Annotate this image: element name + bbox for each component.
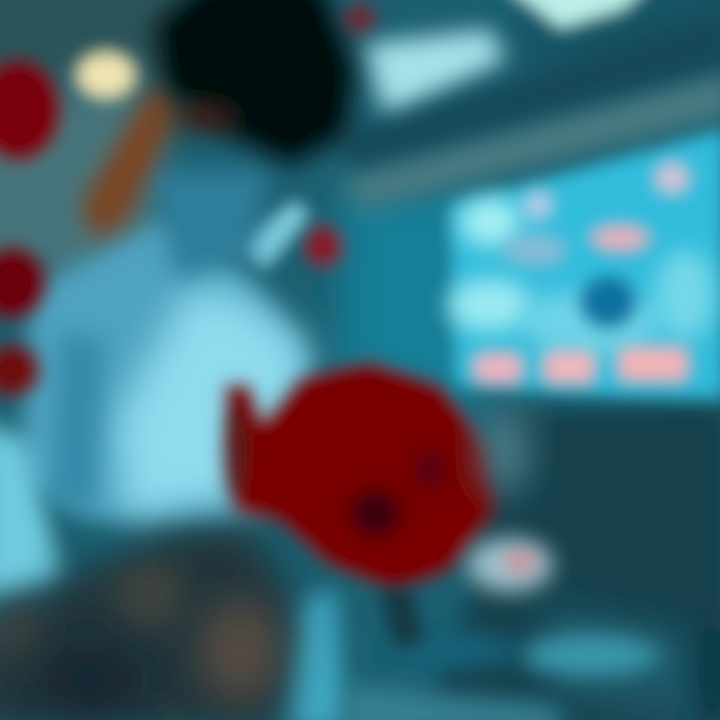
researcher	[0, 0, 355, 600]
raised arm	[80, 80, 178, 240]
dark hair	[155, 0, 355, 165]
floating red cell: top	[345, 3, 375, 33]
bottom centre bright strip	[285, 590, 345, 720]
floating red cell: small centre	[305, 226, 341, 266]
ceiling lamp	[76, 51, 136, 99]
floating red cell: left middle	[0, 247, 46, 319]
lab coat	[0, 170, 310, 600]
ceiling light panels	[340, 0, 720, 210]
floating red cell: left lower	[0, 344, 40, 396]
lower right counter	[380, 402, 720, 720]
wall monitor	[448, 130, 720, 405]
pale glove near heart	[468, 405, 552, 591]
floating red cell: top left	[0, 60, 60, 160]
large red heart	[223, 362, 495, 650]
monitor status labels	[474, 347, 688, 383]
foreground hand and sleeve	[0, 525, 295, 720]
